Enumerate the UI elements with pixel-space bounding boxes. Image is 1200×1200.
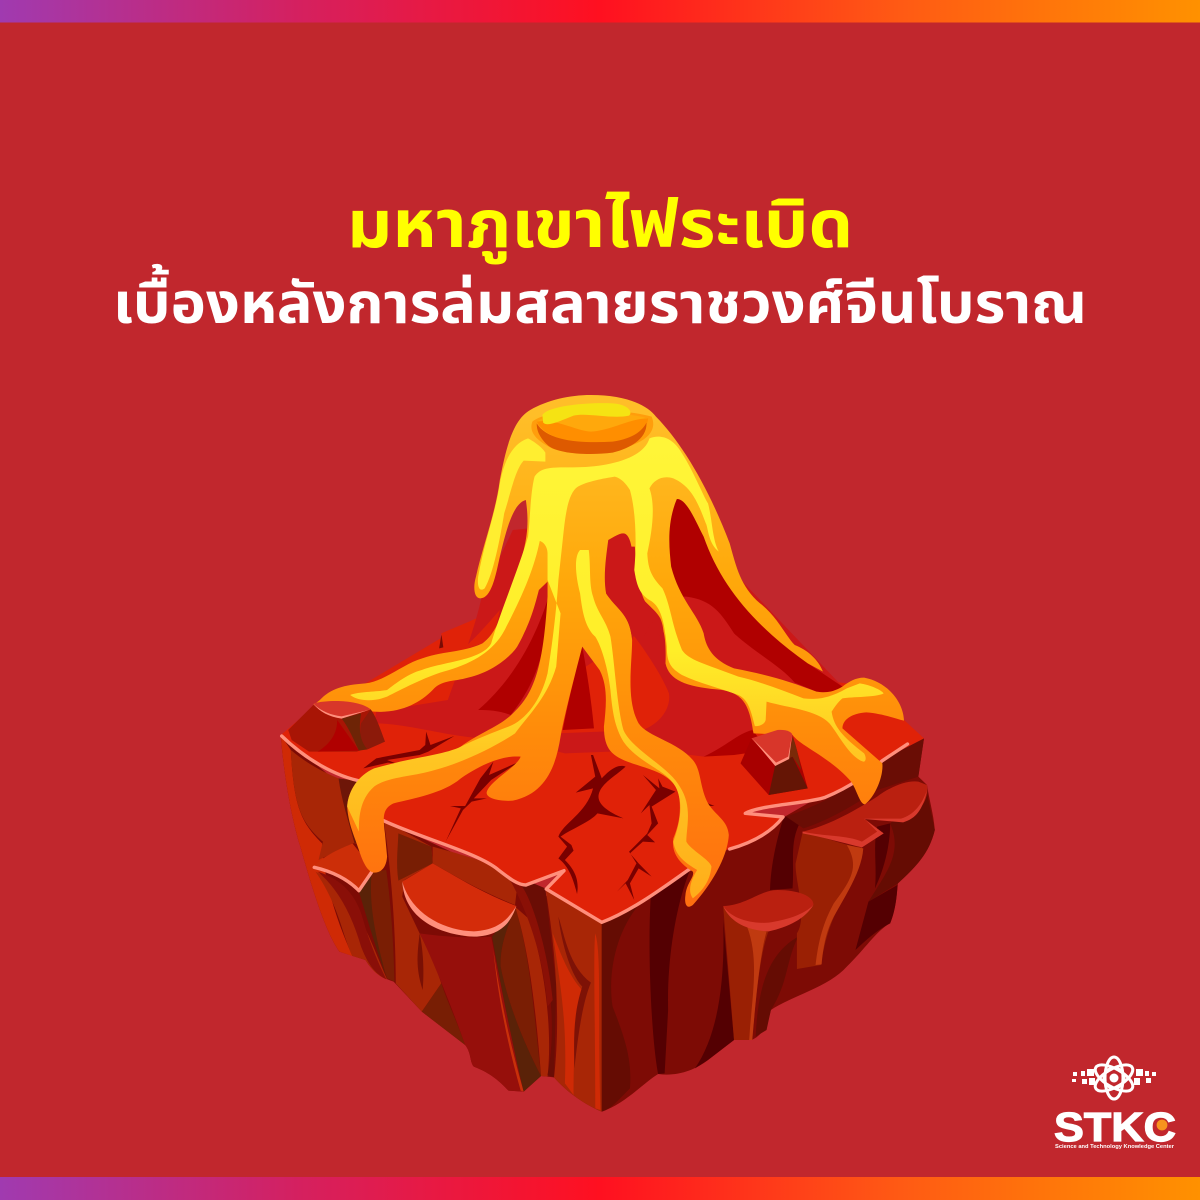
crater lake	[537, 415, 648, 443]
ledge: lower right	[723, 890, 813, 931]
volcano cone and lava	[288, 395, 904, 907]
crater rim	[531, 410, 653, 454]
illustration: floating volcano island	[281, 395, 935, 1112]
lava cap	[474, 395, 823, 672]
crater lip	[537, 412, 648, 432]
lava flow: left arm	[313, 500, 574, 712]
logo: STKC	[1054, 1057, 1176, 1150]
lava highlight: left drip	[478, 438, 545, 590]
crater yellow glint	[542, 403, 630, 424]
island top surface	[281, 637, 924, 922]
crater	[531, 403, 653, 454]
dark slope centre	[563, 647, 594, 730]
ledge: left	[313, 843, 374, 892]
dark slope right	[669, 499, 842, 692]
ledge: upper right	[803, 781, 927, 847]
cliff silhouette	[281, 735, 935, 1112]
logo tagline: Science and Technology Knowledge Center	[1055, 1144, 1175, 1150]
left face shading	[281, 735, 602, 1112]
dark slope centre-left	[478, 600, 548, 715]
bottom gradient bar	[0, 1177, 1200, 1200]
lava highlight: crest and right arm	[347, 437, 884, 832]
surface cracks	[363, 732, 715, 900]
surface rim highlight	[282, 736, 907, 922]
crater inner shadow	[537, 423, 646, 454]
mountain orange facet centre	[556, 633, 669, 733]
mountain orange facet left	[461, 610, 500, 651]
gap between trunk and right strand	[605, 533, 663, 640]
right face shading	[602, 738, 935, 1112]
logo pixels	[1072, 1069, 1156, 1085]
mountain red slope	[374, 513, 842, 757]
rock: right boulder	[741, 730, 808, 795]
lava flow: trunk and lower branches	[347, 540, 729, 907]
lava highlight: centre strand	[576, 550, 711, 898]
top gradient bar	[0, 0, 1200, 22]
dark slope lower right	[704, 730, 769, 757]
ledge: centre	[402, 863, 516, 937]
title: yellow headline: มหาภูเขาไฟระเบิด	[347, 187, 853, 265]
rock: left boulder	[288, 701, 385, 752]
logo wordmark: STKC	[1054, 1104, 1176, 1150]
island cliff faces	[281, 637, 935, 1112]
logo orange dot	[1157, 1120, 1167, 1130]
small back spike	[439, 635, 447, 648]
mountain base	[365, 613, 530, 713]
logo icon: atom	[1091, 1057, 1137, 1099]
lava flow: right arm	[632, 487, 904, 804]
subtitle: white headline: เบื้องหลังการล่มสลายราชวงศ์จีนโบราณ	[113, 263, 1087, 336]
